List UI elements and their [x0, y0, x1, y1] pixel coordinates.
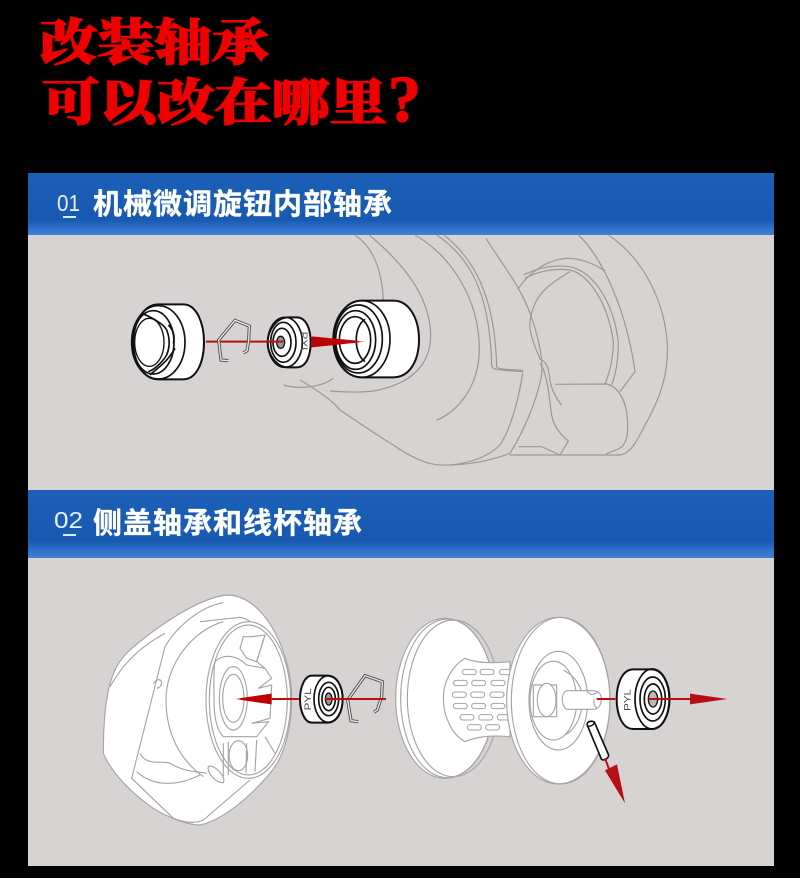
title: 改装轴承	[40, 15, 269, 71]
panel: knob bearing	[28, 173, 774, 490]
icon: knob socket	[333, 301, 419, 377]
spool slots	[452, 669, 513, 730]
title: 可以改在哪里	[42, 75, 387, 131]
header bar 1: 机械微调旋钮内部轴承	[93, 188, 393, 221]
panel background 2	[28, 558, 774, 866]
icon: spool	[396, 617, 727, 803]
arrow: red cone	[312, 336, 367, 347]
icon: bearing	[617, 669, 670, 729]
header bar 2: 02	[54, 507, 83, 533]
icon: knob cap	[132, 304, 204, 379]
icon: clip	[347, 676, 386, 722]
header bar 2	[28, 490, 774, 558]
header bar 2: 侧盖轴承和线杯轴承	[93, 507, 363, 540]
header bar 1	[28, 173, 774, 235]
icon: bearing	[300, 676, 347, 723]
red axis line	[206, 339, 283, 345]
title	[40, 15, 421, 136]
bearing brand text: PYL	[623, 689, 633, 711]
icon: clip	[219, 320, 249, 361]
icon: bearing	[267, 317, 311, 367]
panel: side cover and spool bearings	[28, 490, 774, 866]
red axis line	[272, 696, 386, 702]
header bar 1: 01	[57, 190, 80, 216]
bearing brand text: PYL	[299, 332, 309, 354]
arrow: pin arrow	[605, 758, 625, 803]
bearing brand text: PYL	[303, 688, 313, 710]
exploded knob parts	[132, 301, 419, 379]
panel background 1	[28, 235, 774, 490]
icon: pin	[587, 721, 609, 760]
arrow: right arrow	[648, 694, 727, 704]
reel body line art	[283, 235, 667, 465]
icon: side cover	[103, 595, 386, 825]
title: ?	[388, 63, 421, 136]
arrow: red cone	[234, 694, 272, 704]
